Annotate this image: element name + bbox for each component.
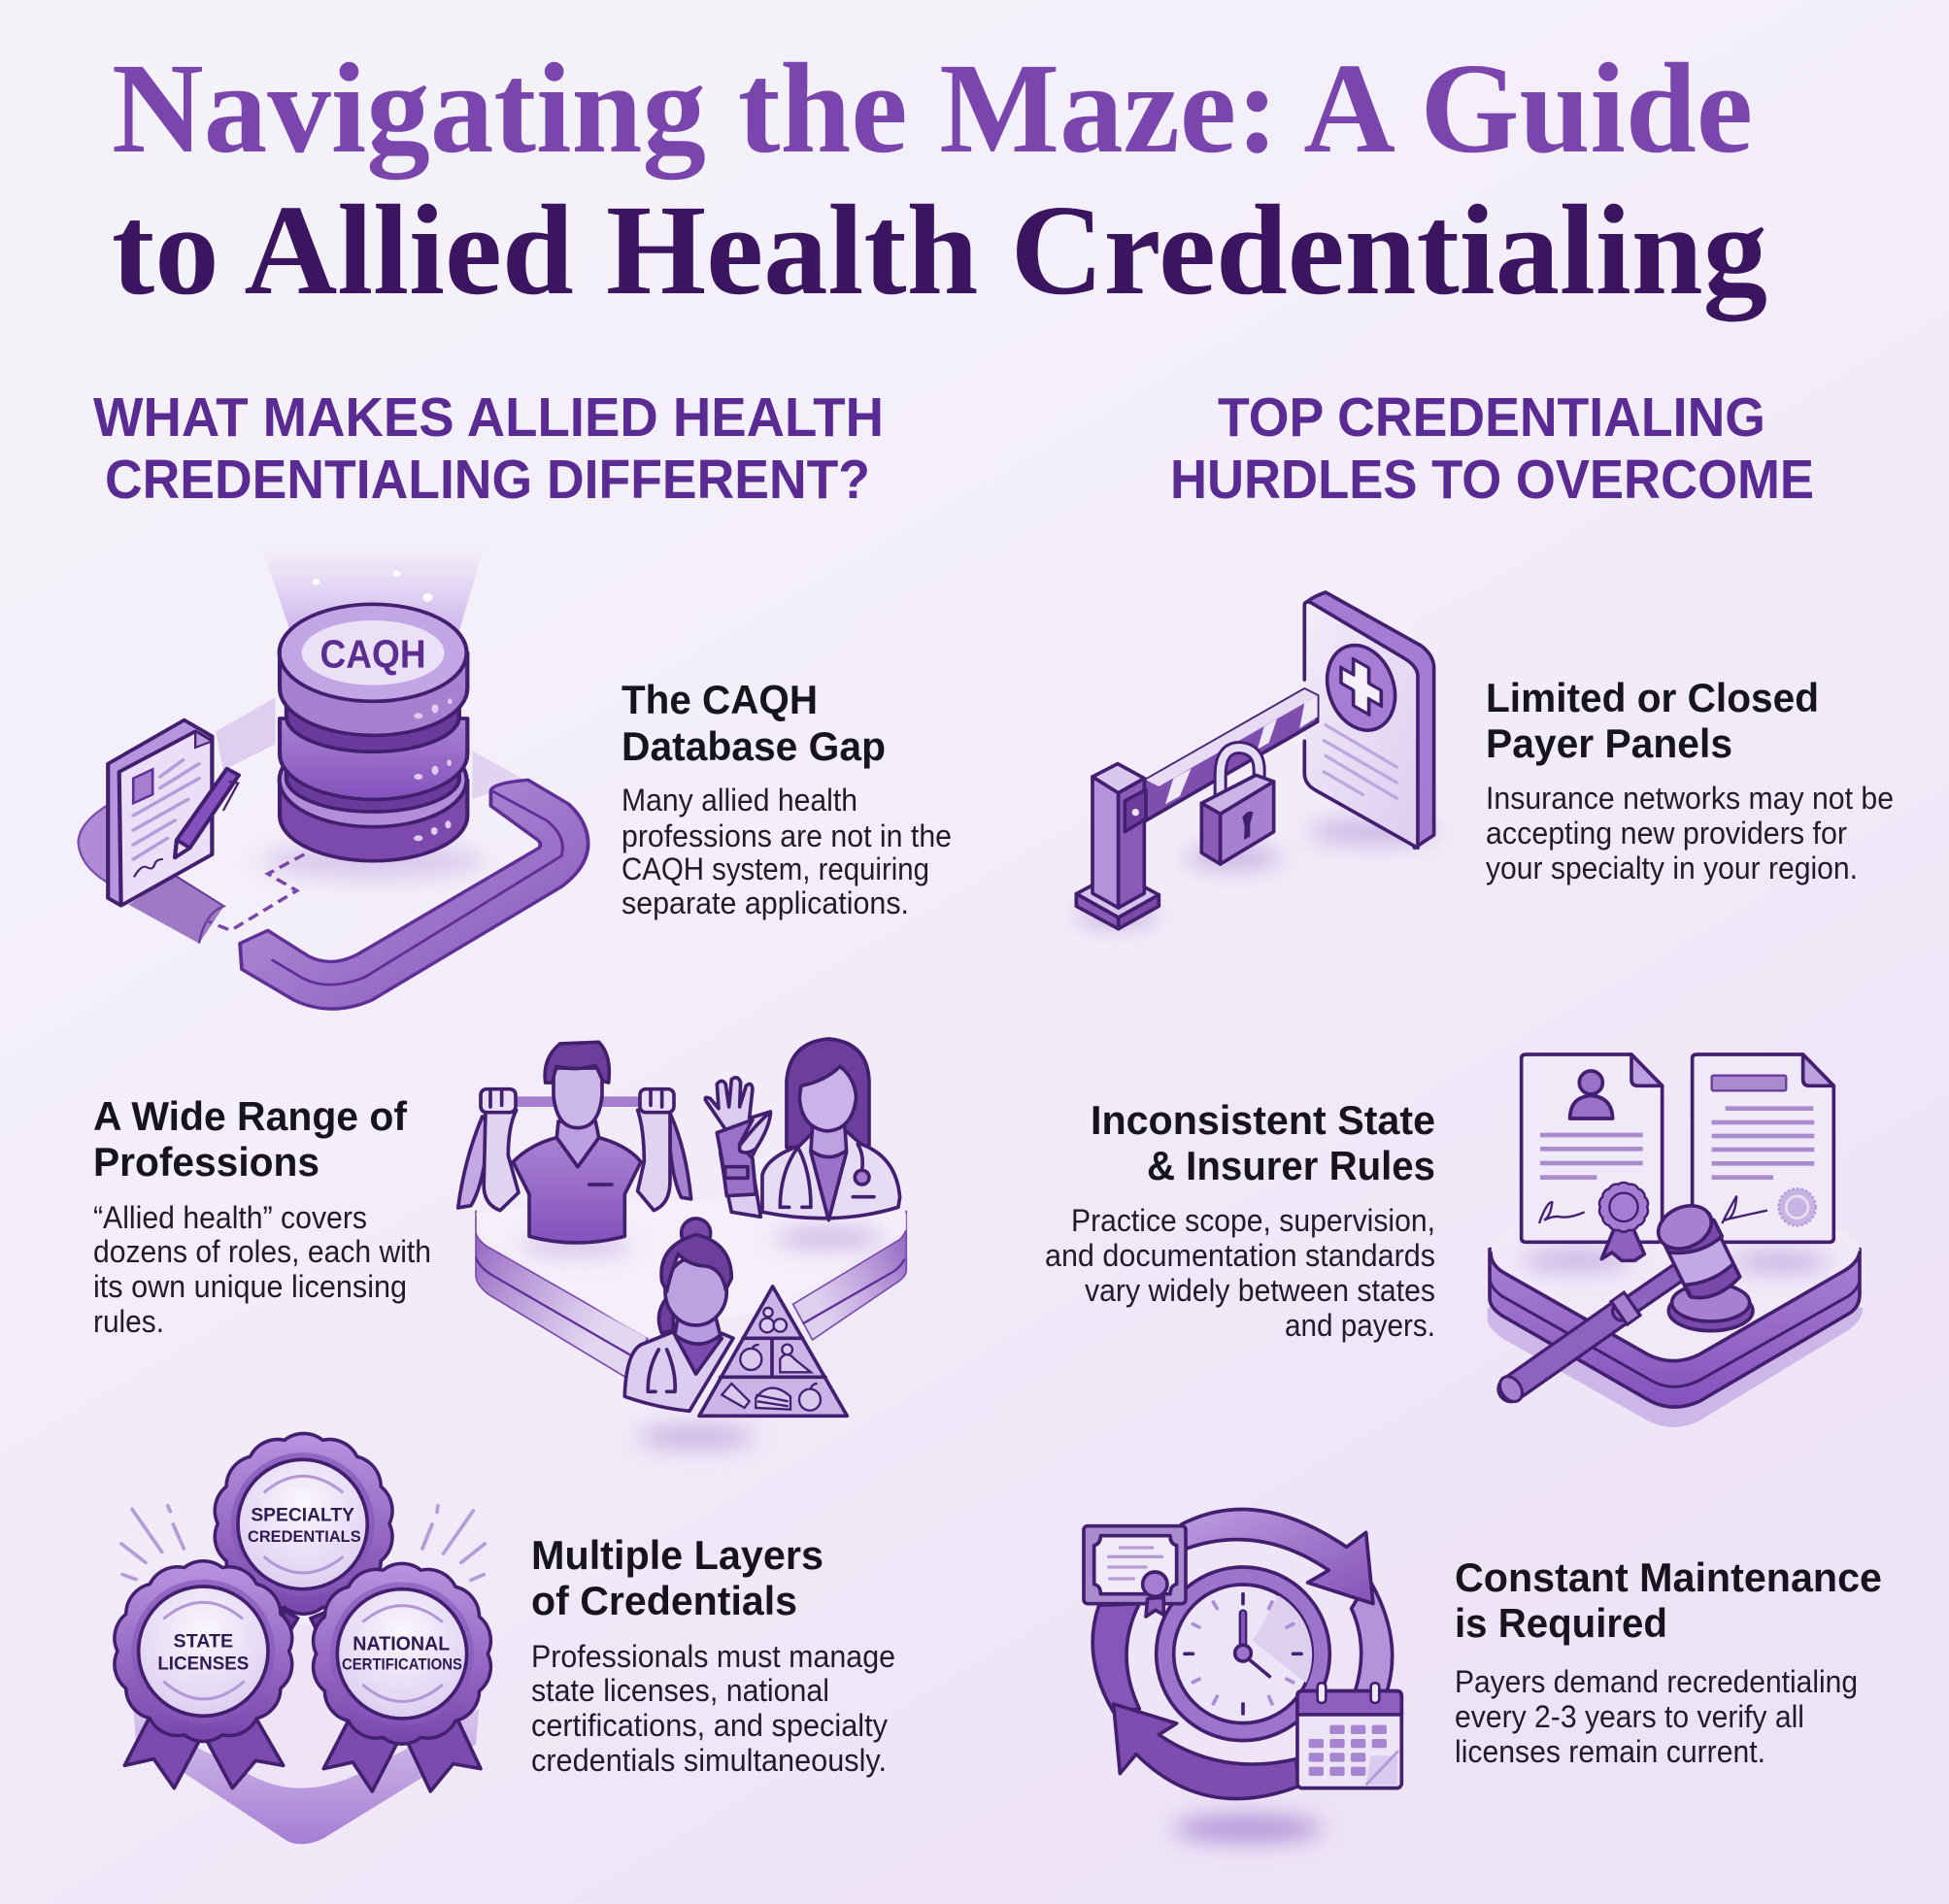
body text: professions are not in the bbox=[622, 818, 952, 853]
body text: licenses remain current. bbox=[1455, 1734, 1765, 1769]
badge: specialty credentials: SPECIALTY bbox=[251, 1506, 354, 1526]
subheading: A Wide Range of bbox=[93, 1093, 408, 1139]
icon: barrier gate, padlock and insurance card bbox=[1075, 592, 1437, 929]
subheading: Database Gap bbox=[622, 723, 886, 769]
body text: and documentation standards bbox=[1045, 1238, 1435, 1273]
doctor woman bbox=[762, 1039, 900, 1220]
heading: what makes allied health credentialing different: CREDENTIALING DIFFERENT? bbox=[105, 449, 870, 511]
subheading: Payer Panels bbox=[1486, 720, 1732, 766]
heading: top credentialing hurdles: HURDLES TO OVERCOME bbox=[1170, 449, 1814, 511]
subheading bbox=[1091, 1097, 1435, 1188]
subheading bbox=[1455, 1554, 1882, 1646]
badge: state licenses bbox=[115, 1561, 292, 1788]
subheading: Limited or Closed bbox=[1486, 675, 1819, 720]
heading: what makes allied health credentialing different bbox=[93, 386, 884, 511]
body text: its own unique licensing bbox=[93, 1269, 407, 1304]
panel: constant maintenance bbox=[1084, 1510, 1882, 1842]
body text: Practice scope, supervision, bbox=[1071, 1203, 1435, 1238]
subheading: Inconsistent State bbox=[1091, 1097, 1435, 1143]
badge: national certifications bbox=[314, 1563, 490, 1791]
heading: top credentialing hurdles bbox=[1170, 386, 1814, 511]
body text bbox=[622, 783, 952, 920]
body text bbox=[1455, 1664, 1858, 1769]
icon: allied health professionals on platform bbox=[458, 1039, 906, 1447]
body text: vary widely between states bbox=[1085, 1273, 1435, 1308]
icon: renewal cycle with clock, certificate and calendar bbox=[1084, 1510, 1401, 1842]
body text bbox=[531, 1639, 895, 1778]
wrist brace hand bbox=[705, 1078, 770, 1217]
panel: CAQH database gap bbox=[79, 549, 952, 1009]
title: Navigating the Maze: A Guide bbox=[112, 36, 1753, 180]
subheading bbox=[622, 677, 886, 769]
icon: documents, gavel and platform bbox=[1488, 1054, 1863, 1427]
badge: state licenses: STATE bbox=[173, 1632, 233, 1653]
panel: limited or closed payer panels bbox=[1075, 592, 1894, 929]
title bbox=[112, 36, 1767, 321]
man with resistance band bbox=[458, 1042, 691, 1243]
subheading: The CAQH bbox=[622, 677, 818, 722]
subheading: Professions bbox=[93, 1139, 319, 1185]
body text: certifications, and specialty bbox=[531, 1708, 888, 1743]
subheading bbox=[531, 1532, 823, 1623]
body text bbox=[1486, 781, 1894, 885]
panel: multiple layers of credentials bbox=[115, 1433, 895, 1844]
icon: CAQH database with document and broken track bbox=[79, 549, 588, 1009]
subheading bbox=[1486, 675, 1819, 766]
heading: top credentialing hurdles: TOP CREDENTIALING bbox=[1218, 386, 1765, 449]
body text: Many allied health bbox=[622, 783, 857, 818]
body text: CAQH system, requiring bbox=[622, 852, 929, 886]
body text: separate applications. bbox=[622, 885, 909, 920]
subheading: Constant Maintenance bbox=[1455, 1554, 1882, 1600]
body text bbox=[1045, 1203, 1435, 1343]
body text: credentials simultaneously. bbox=[531, 1743, 887, 1778]
body text: accepting new providers for bbox=[1486, 816, 1847, 851]
body text: rules. bbox=[93, 1304, 164, 1339]
body text: state licenses, national bbox=[531, 1673, 829, 1708]
badge: specialty credentials bbox=[215, 1433, 392, 1638]
body text: Payers demand recredentialing bbox=[1455, 1664, 1858, 1699]
panel: wide range of professions bbox=[93, 1039, 906, 1447]
subheading: of Credentials bbox=[531, 1578, 797, 1623]
badge: specialty credentials: CREDENTIALS bbox=[248, 1527, 361, 1546]
subheading: Multiple Layers bbox=[531, 1532, 823, 1578]
badge: state licenses: LICENSES bbox=[157, 1653, 249, 1674]
badge: national certifications: CERTIFICATIONS bbox=[342, 1654, 462, 1673]
heading: what makes allied health credentialing different: WHAT MAKES ALLIED HEALTH bbox=[93, 386, 884, 449]
subheading: is Required bbox=[1455, 1600, 1667, 1646]
body text: and payers. bbox=[1285, 1308, 1435, 1343]
body text: every 2-3 years to verify all bbox=[1455, 1699, 1804, 1734]
body text: your specialty in your region. bbox=[1486, 851, 1858, 885]
badge: national certifications: NATIONAL bbox=[353, 1633, 450, 1654]
body text: “Allied health” covers bbox=[93, 1200, 367, 1235]
subheading bbox=[93, 1093, 408, 1185]
nutritionist with food pyramid bbox=[624, 1219, 847, 1416]
body text bbox=[93, 1200, 431, 1339]
body text: Professionals must manage bbox=[531, 1639, 895, 1674]
title: to Allied Health Credentialing bbox=[112, 178, 1767, 321]
icon: CAQH database with document and broken track: CAQH bbox=[320, 632, 426, 677]
body text: dozens of roles, each with bbox=[93, 1234, 431, 1269]
subheading: & Insurer Rules bbox=[1147, 1143, 1435, 1188]
body text: Insurance networks may not be bbox=[1486, 781, 1894, 816]
icon: three credential rosettes bbox=[115, 1433, 490, 1844]
panel: inconsistent state and insurer rules bbox=[1045, 1054, 1863, 1427]
